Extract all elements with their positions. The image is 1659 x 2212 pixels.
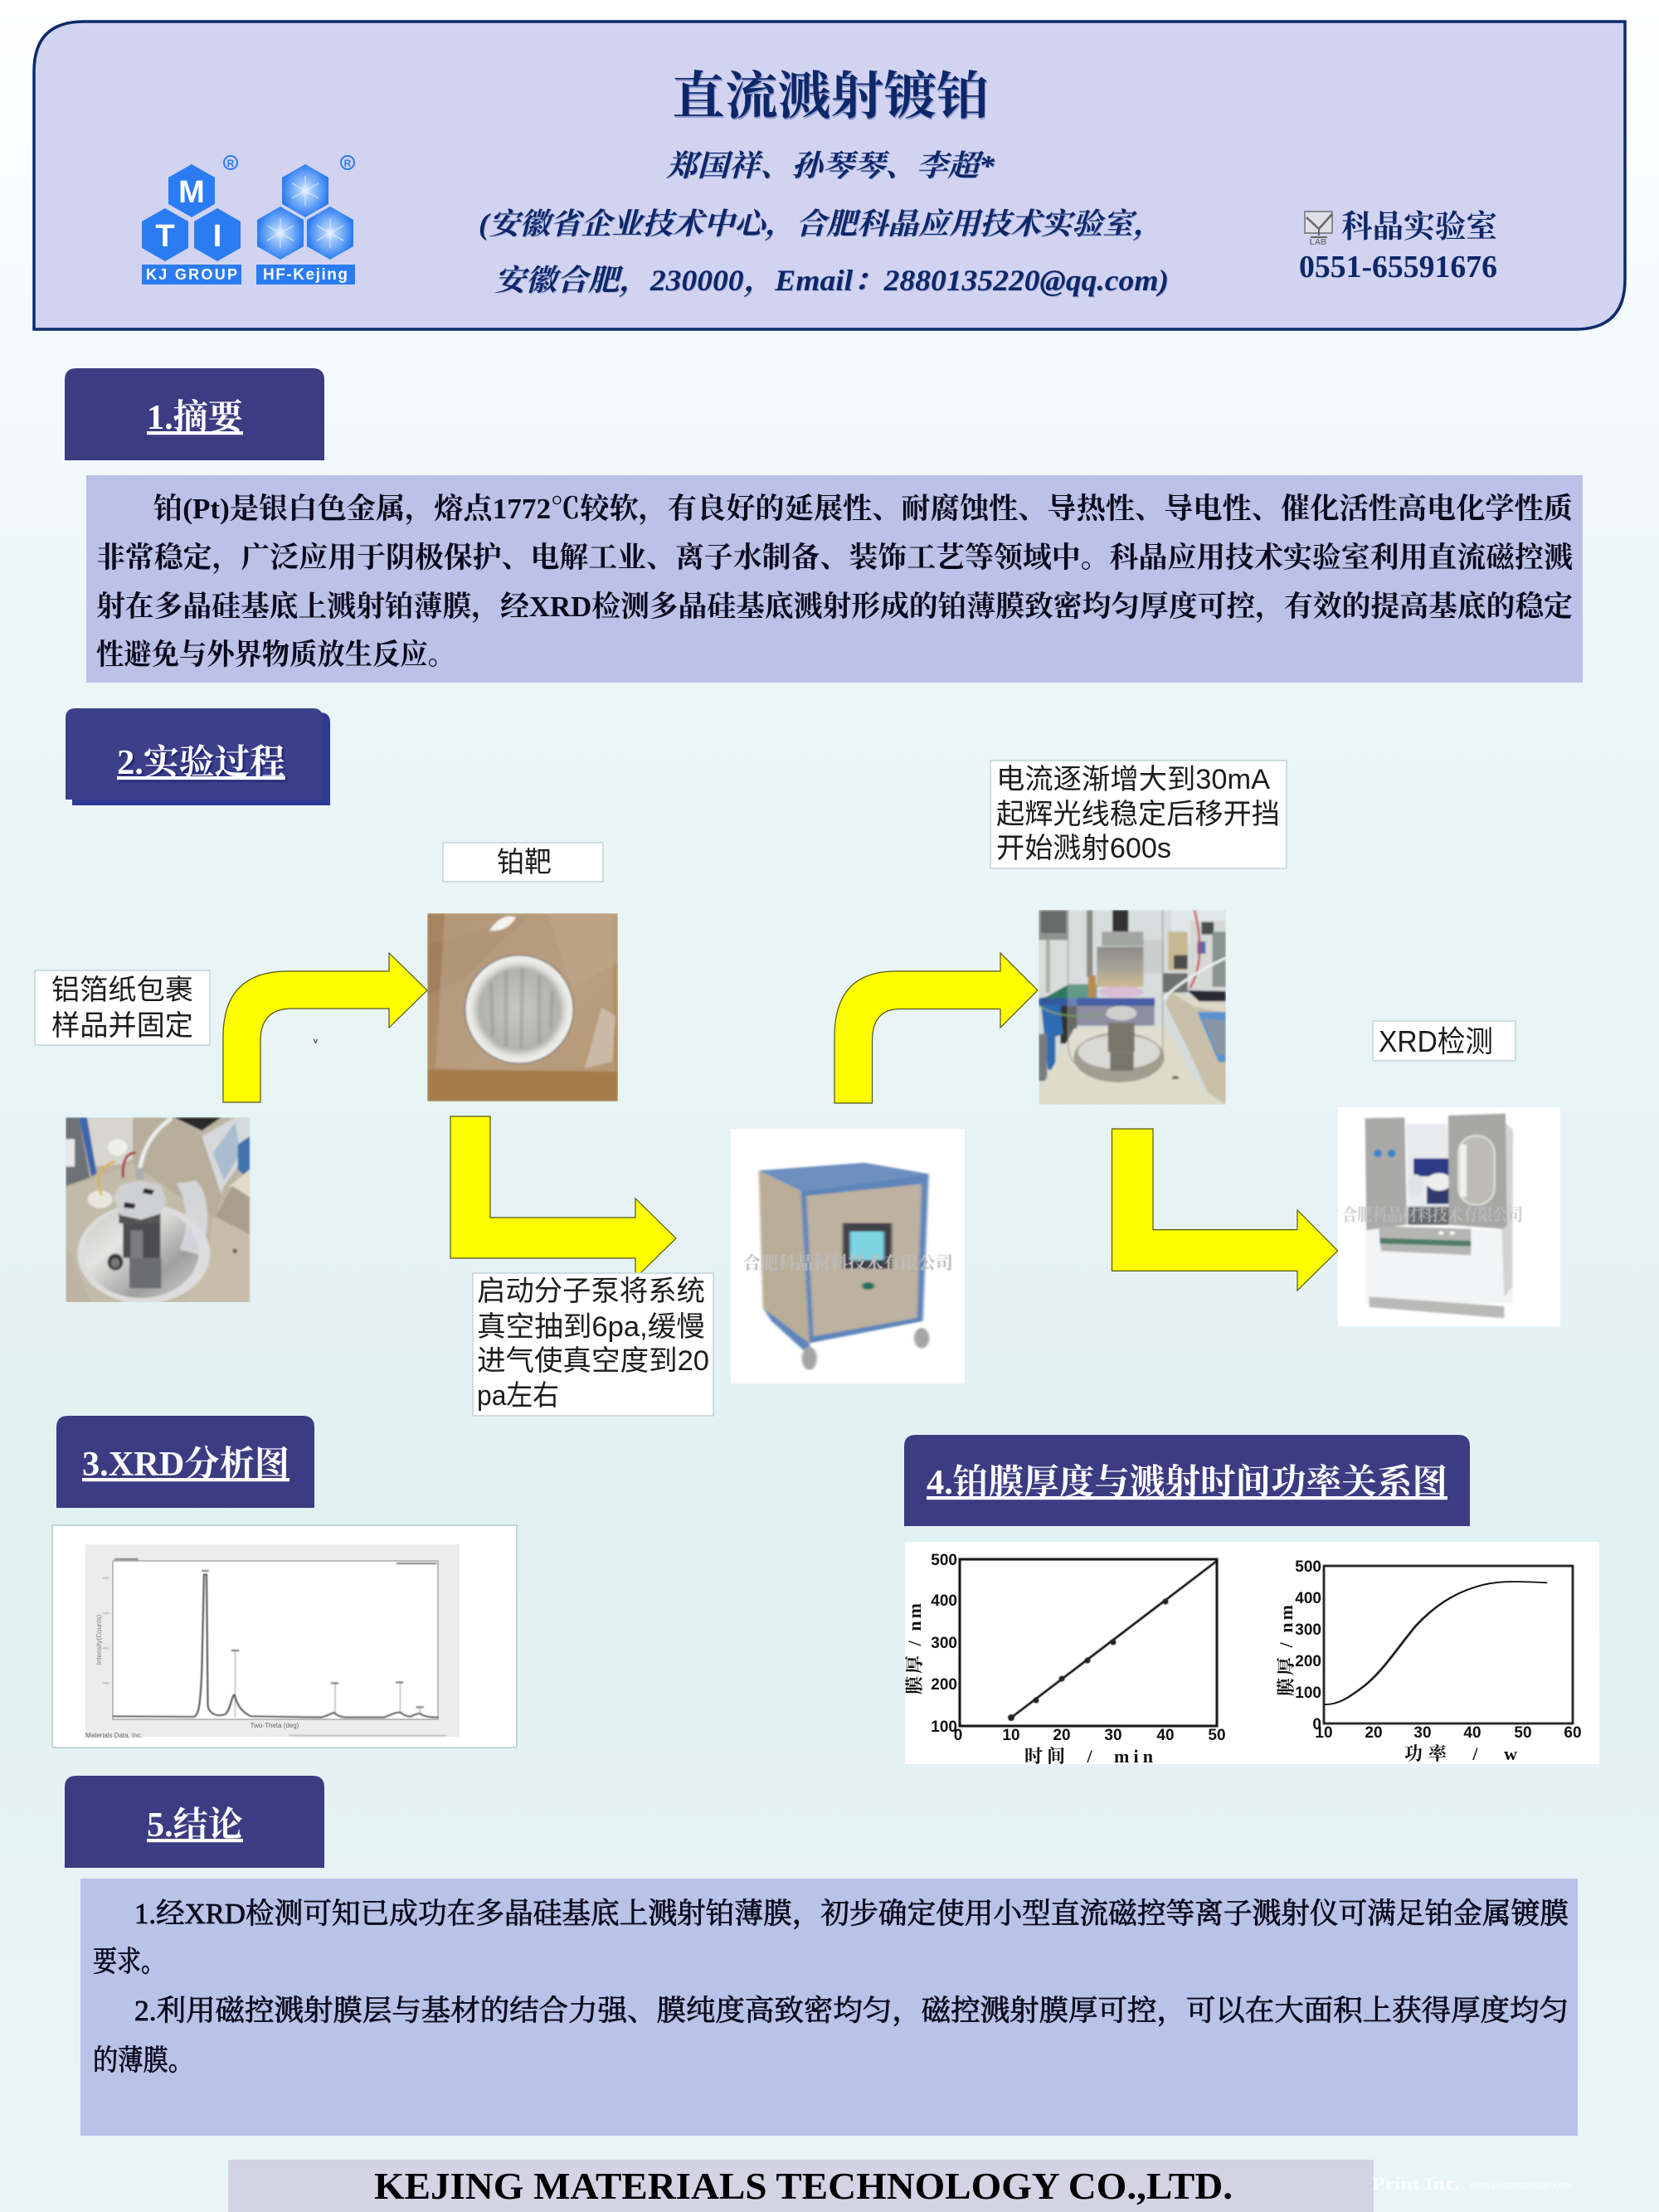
arrow: chamber to XRD: [1112, 1129, 1338, 1291]
faint print credit: [1372, 2173, 1572, 2194]
chart: thickness vs time: 0: [954, 1727, 962, 1744]
section heading 1: [65, 368, 324, 460]
photo: sputtering chamber: [1039, 910, 1226, 1105]
chart: thickness vs time: 500: [931, 1552, 957, 1569]
affiliation line 2: 安徽合肥，230000，Email：2880135220@qq.com): [494, 264, 1169, 297]
label: current and sputtering: 开始溅射600s: [996, 833, 1171, 864]
label: wrap sample: 样品并固定: [51, 1010, 193, 1042]
photo: sample on stage: [66, 1117, 250, 1304]
logo: HF-Kejing: R: [344, 158, 352, 169]
panel: abstract: 铂(Pt)是银白色金属，熔点1772℃较软，有良好的延展性、耐腐蚀性、导热性、导电性、催化活性高电化学性质: [153, 493, 1573, 526]
label: current and sputtering: 电流逐渐增大到30mA: [996, 764, 1270, 795]
panel: conclusions: 的薄膜。: [93, 2044, 193, 2077]
label: start pump: 启动分子泵将系统: [477, 1276, 705, 1307]
chart: thickness vs time: 50: [1208, 1727, 1226, 1744]
chart: thickness vs power: 200: [1295, 1653, 1321, 1670]
lab name: 科晶实验室: [1341, 210, 1497, 245]
logo: KJ Group MTI: I: [213, 219, 221, 254]
header panel: [34, 22, 1625, 329]
chart: thickness vs power: 300: [1295, 1621, 1321, 1639]
chart: thickness vs time: 100: [931, 1719, 957, 1736]
phone number: 0551-65591676: [1299, 250, 1497, 284]
chart: thickness vs power: 50: [1514, 1724, 1532, 1742]
label: current and sputtering: 起辉光线稳定后移开挡: [996, 799, 1280, 830]
logo: HF-Kejing: [256, 156, 355, 284]
label: wrap sample: [35, 970, 210, 1045]
chart: thickness vs time: 300: [931, 1635, 957, 1652]
icon: lab logo: [1305, 211, 1332, 247]
chart: thickness vs power: 40: [1463, 1724, 1481, 1742]
chart: XRD pattern: [52, 1525, 517, 1748]
logo: KJ Group MTI: [142, 156, 241, 284]
section heading 4: [904, 1435, 1470, 1526]
chart: thickness vs power: 膜厚 / nm: [1276, 1605, 1297, 1696]
panel: abstract: 非常稳定，广泛应用于阴极保护、电解工业、离子水制备、装饰工艺等领域中。科晶应用技术实验室利用直流磁控溅: [96, 541, 1574, 575]
label: XRD test: XRD检测: [1379, 1024, 1493, 1058]
label: wrap sample: 铝箔纸包裹: [51, 975, 193, 1006]
chart: thickness vs power: 400: [1295, 1590, 1321, 1607]
label: start pump: pa左右: [477, 1380, 559, 1412]
chart: thickness vs time: 10: [1002, 1727, 1020, 1744]
panel: abstract: [86, 475, 1583, 683]
photo: XRD instrument: [1338, 1107, 1560, 1326]
footer band: KEJING MATERIALS TECHNOLOGY CO.,LTD.: [374, 2165, 1233, 2207]
section heading 1: 1.摘要: [147, 398, 244, 437]
section heading 5: 5.结论: [147, 1806, 243, 1845]
logo: KJ Group MTI: KJ GROUP: [146, 266, 237, 283]
chart: thickness vs power: 500: [1295, 1558, 1321, 1576]
label: start pump: 真空抽到6pa,缓慢: [477, 1311, 705, 1343]
panel: abstract: 性避免与外界物质放生反应。: [96, 639, 455, 671]
chart: thickness vs power: 功率 / w: [1404, 1743, 1517, 1764]
section heading 3: [56, 1416, 314, 1508]
chart: XRD pattern: Two-Theta (deg): [251, 1722, 299, 1729]
panel: conclusions: 2.利用磁控溅射膜层与基材的结合力强、膜纯度高致密均匀，磁控溅射膜厚可控，可以在大面积上获得厚度均匀: [134, 1995, 1569, 2027]
chart: thickness vs time: 30: [1104, 1727, 1122, 1744]
section heading 3: 3.XRD分析图: [82, 1445, 289, 1484]
panel: conclusions: [80, 1879, 1578, 2136]
label: start pump: [473, 1273, 713, 1416]
label: start pump: 进气使真空度到20: [477, 1345, 709, 1377]
panel: conclusions: 要求。: [93, 1946, 165, 1978]
chart: thickness vs time: 400: [931, 1592, 957, 1610]
faint print credit: Print Inc.: [1372, 2173, 1460, 2194]
arrow: target to pump: [450, 1116, 676, 1278]
chart: thickness vs power: 20: [1365, 1724, 1383, 1742]
logo: KJ Group MTI: T: [155, 219, 175, 254]
chart: thickness vs power: [1276, 1558, 1582, 1764]
logo: HF-Kejing: HF-Kejing: [263, 266, 348, 284]
authors: 郑国祥、孙琴琴、李超*: [666, 149, 995, 182]
panel: abstract: 射在多晶硅基底上溅射铂薄膜，经XRD检测多晶硅基底溅射形成的铂薄膜致密均匀厚度可控，有效的提高基底的稳定: [96, 591, 1573, 624]
chart: thickness vs time: 40: [1156, 1727, 1175, 1744]
photo: XRD instrument: 合肥科晶材料技术有限公司: [1342, 1205, 1523, 1225]
chart: thickness vs power: 0: [1312, 1716, 1321, 1733]
arrow: pump to chamber: [834, 953, 1038, 1103]
panel: conclusions: 1.经XRD检测可知已成功在多晶硅基底上溅射铂薄膜，初步确定使用小型直流磁控等离子溅射仪可满足铂金属镀膜: [134, 1898, 1569, 1930]
chart: thickness vs time: 20: [1053, 1727, 1071, 1744]
footer band: [228, 2160, 1374, 2212]
logo: KJ Group MTI: M: [178, 175, 205, 210]
tiny mark: v: [314, 1037, 318, 1045]
section heading 2: [66, 708, 330, 805]
chart: thickness vs time: 200: [931, 1676, 957, 1694]
section heading 2: 2.实验过程: [117, 743, 285, 782]
chart: thickness vs time: 膜厚 / nm: [904, 1603, 925, 1694]
photo: sputter power unit: 合肥科晶材料技术有限公司: [743, 1253, 953, 1273]
label: current and sputtering: [990, 761, 1287, 868]
label: platinum target: 铂靶: [497, 847, 552, 878]
faint print credit: www.postersession.com: [1469, 2179, 1572, 2191]
chart: thickness vs power: 100: [1295, 1685, 1321, 1702]
chart: XRD pattern: Materials Data, Inc.: [85, 1732, 143, 1739]
photo: sputter power unit: [731, 1129, 965, 1383]
chart: XRD pattern: Intensity(Counts): [95, 1614, 103, 1665]
arrow: sample to target: [223, 953, 427, 1102]
title: 直流溅射镀铂: [672, 69, 990, 125]
chart: thickness vs time: [904, 1552, 1226, 1767]
chart: thickness vs power: 60: [1564, 1724, 1582, 1742]
section heading 4: 4.铂膜厚度与溅射时间功率关系图: [927, 1463, 1447, 1502]
section heading 5: [65, 1776, 324, 1868]
logo: KJ Group MTI: R: [227, 158, 235, 169]
photo: platinum target: [427, 913, 618, 1101]
icon: lab logo: LAB: [1310, 238, 1326, 247]
panel: thickness charts: [904, 1542, 1599, 1767]
chart: thickness vs time: 时间 / min: [1024, 1746, 1153, 1767]
affiliation line 1: (安徽省企业技术中心，合肥科晶应用技术实验室，: [479, 207, 1164, 241]
chart: thickness vs power: 30: [1413, 1724, 1432, 1742]
chart: thickness vs power: 10: [1315, 1724, 1333, 1742]
label: platinum target: [443, 843, 603, 882]
